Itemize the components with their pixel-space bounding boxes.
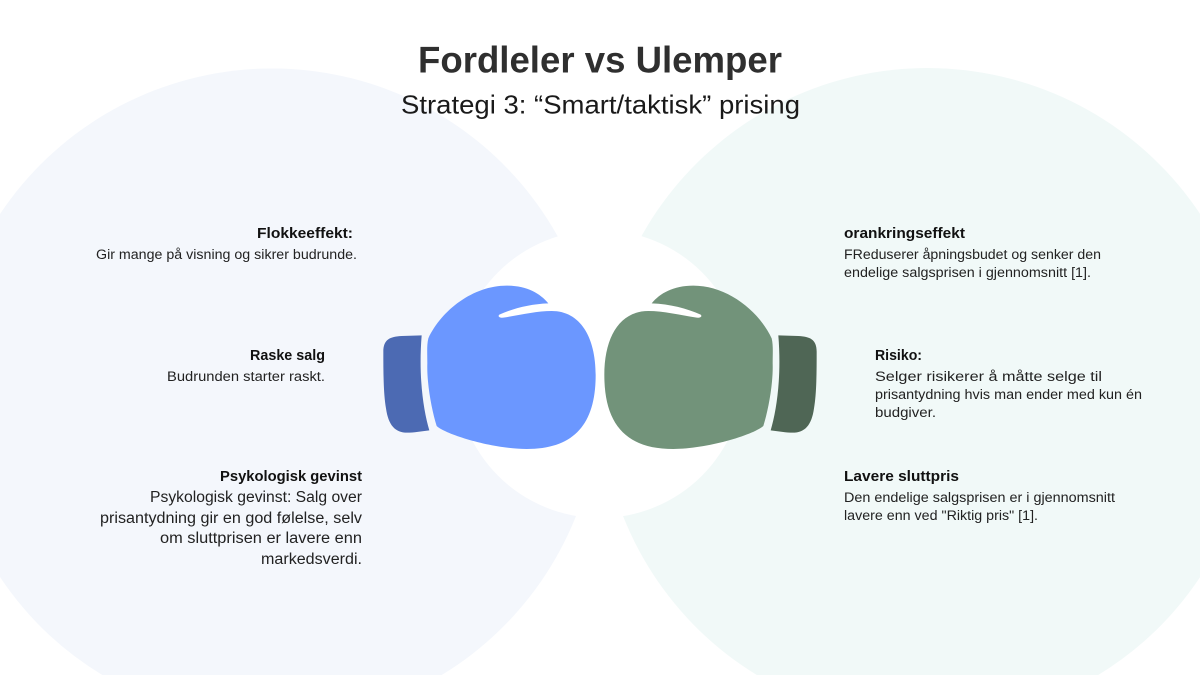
green glove body <box>604 286 773 449</box>
description: budgiver. <box>875 405 936 420</box>
advantage: Raske salg <box>167 348 325 384</box>
right background circle <box>600 68 1200 675</box>
description: FReduserer åpningsbudet og senker den <box>844 247 1101 262</box>
left background circle <box>0 68 599 675</box>
heading: Psykologisk gevinst <box>220 469 362 485</box>
disadvantage: Lavere sluttpris <box>844 469 1115 523</box>
blue glove body <box>427 286 596 449</box>
disadvantage: forankringseffekt <box>844 226 1101 280</box>
advantage: Psykologisk gevinst <box>100 469 362 568</box>
description <box>875 369 1142 420</box>
description: Den endelige salgsprisen er i gjennomsnitt <box>844 490 1115 505</box>
heading: Lavere sluttpris <box>844 469 959 485</box>
description <box>100 489 362 568</box>
description: prisantydning gir en god følelse, selv <box>100 510 362 527</box>
description <box>844 247 1101 280</box>
subtitle: Strategi 3: “Smart/taktisk” prising <box>401 90 800 120</box>
icon: green boxing glove <box>604 286 817 449</box>
description: lavere enn ved "Riktig pris" [1]. <box>844 508 1038 523</box>
description: prisantydning hvis man ender med kun én <box>875 387 1142 402</box>
blue glove cuff <box>383 335 429 433</box>
description: Gir mange på visning og sikrer budrunde. <box>96 247 357 262</box>
green glove cuff <box>771 335 817 433</box>
heading: Flokkeeffekt: <box>257 226 353 242</box>
heading: Risiko: <box>875 348 922 364</box>
title: Fordleler vs Ulemper <box>418 40 782 80</box>
description: markedsverdi. <box>261 551 362 568</box>
advantage: Flokkeeffekt <box>96 226 357 262</box>
description: Budrunden starter raskt. <box>167 369 325 384</box>
icon: blue boxing glove <box>383 286 596 449</box>
description: Psykologisk gevinst: Salg over <box>150 489 362 506</box>
description: Selger risikerer å måtte selge til <box>875 369 1102 384</box>
description <box>844 490 1115 523</box>
disadvantage: Risiko <box>875 348 1142 420</box>
description: endelige salgsprisen i gjennomsnitt [1]. <box>844 265 1091 280</box>
description: om sluttprisen er lavere enn <box>160 530 362 547</box>
center white circle <box>456 230 744 518</box>
heading: Raske salg <box>250 348 325 364</box>
heading: orankringseffekt <box>844 226 965 242</box>
